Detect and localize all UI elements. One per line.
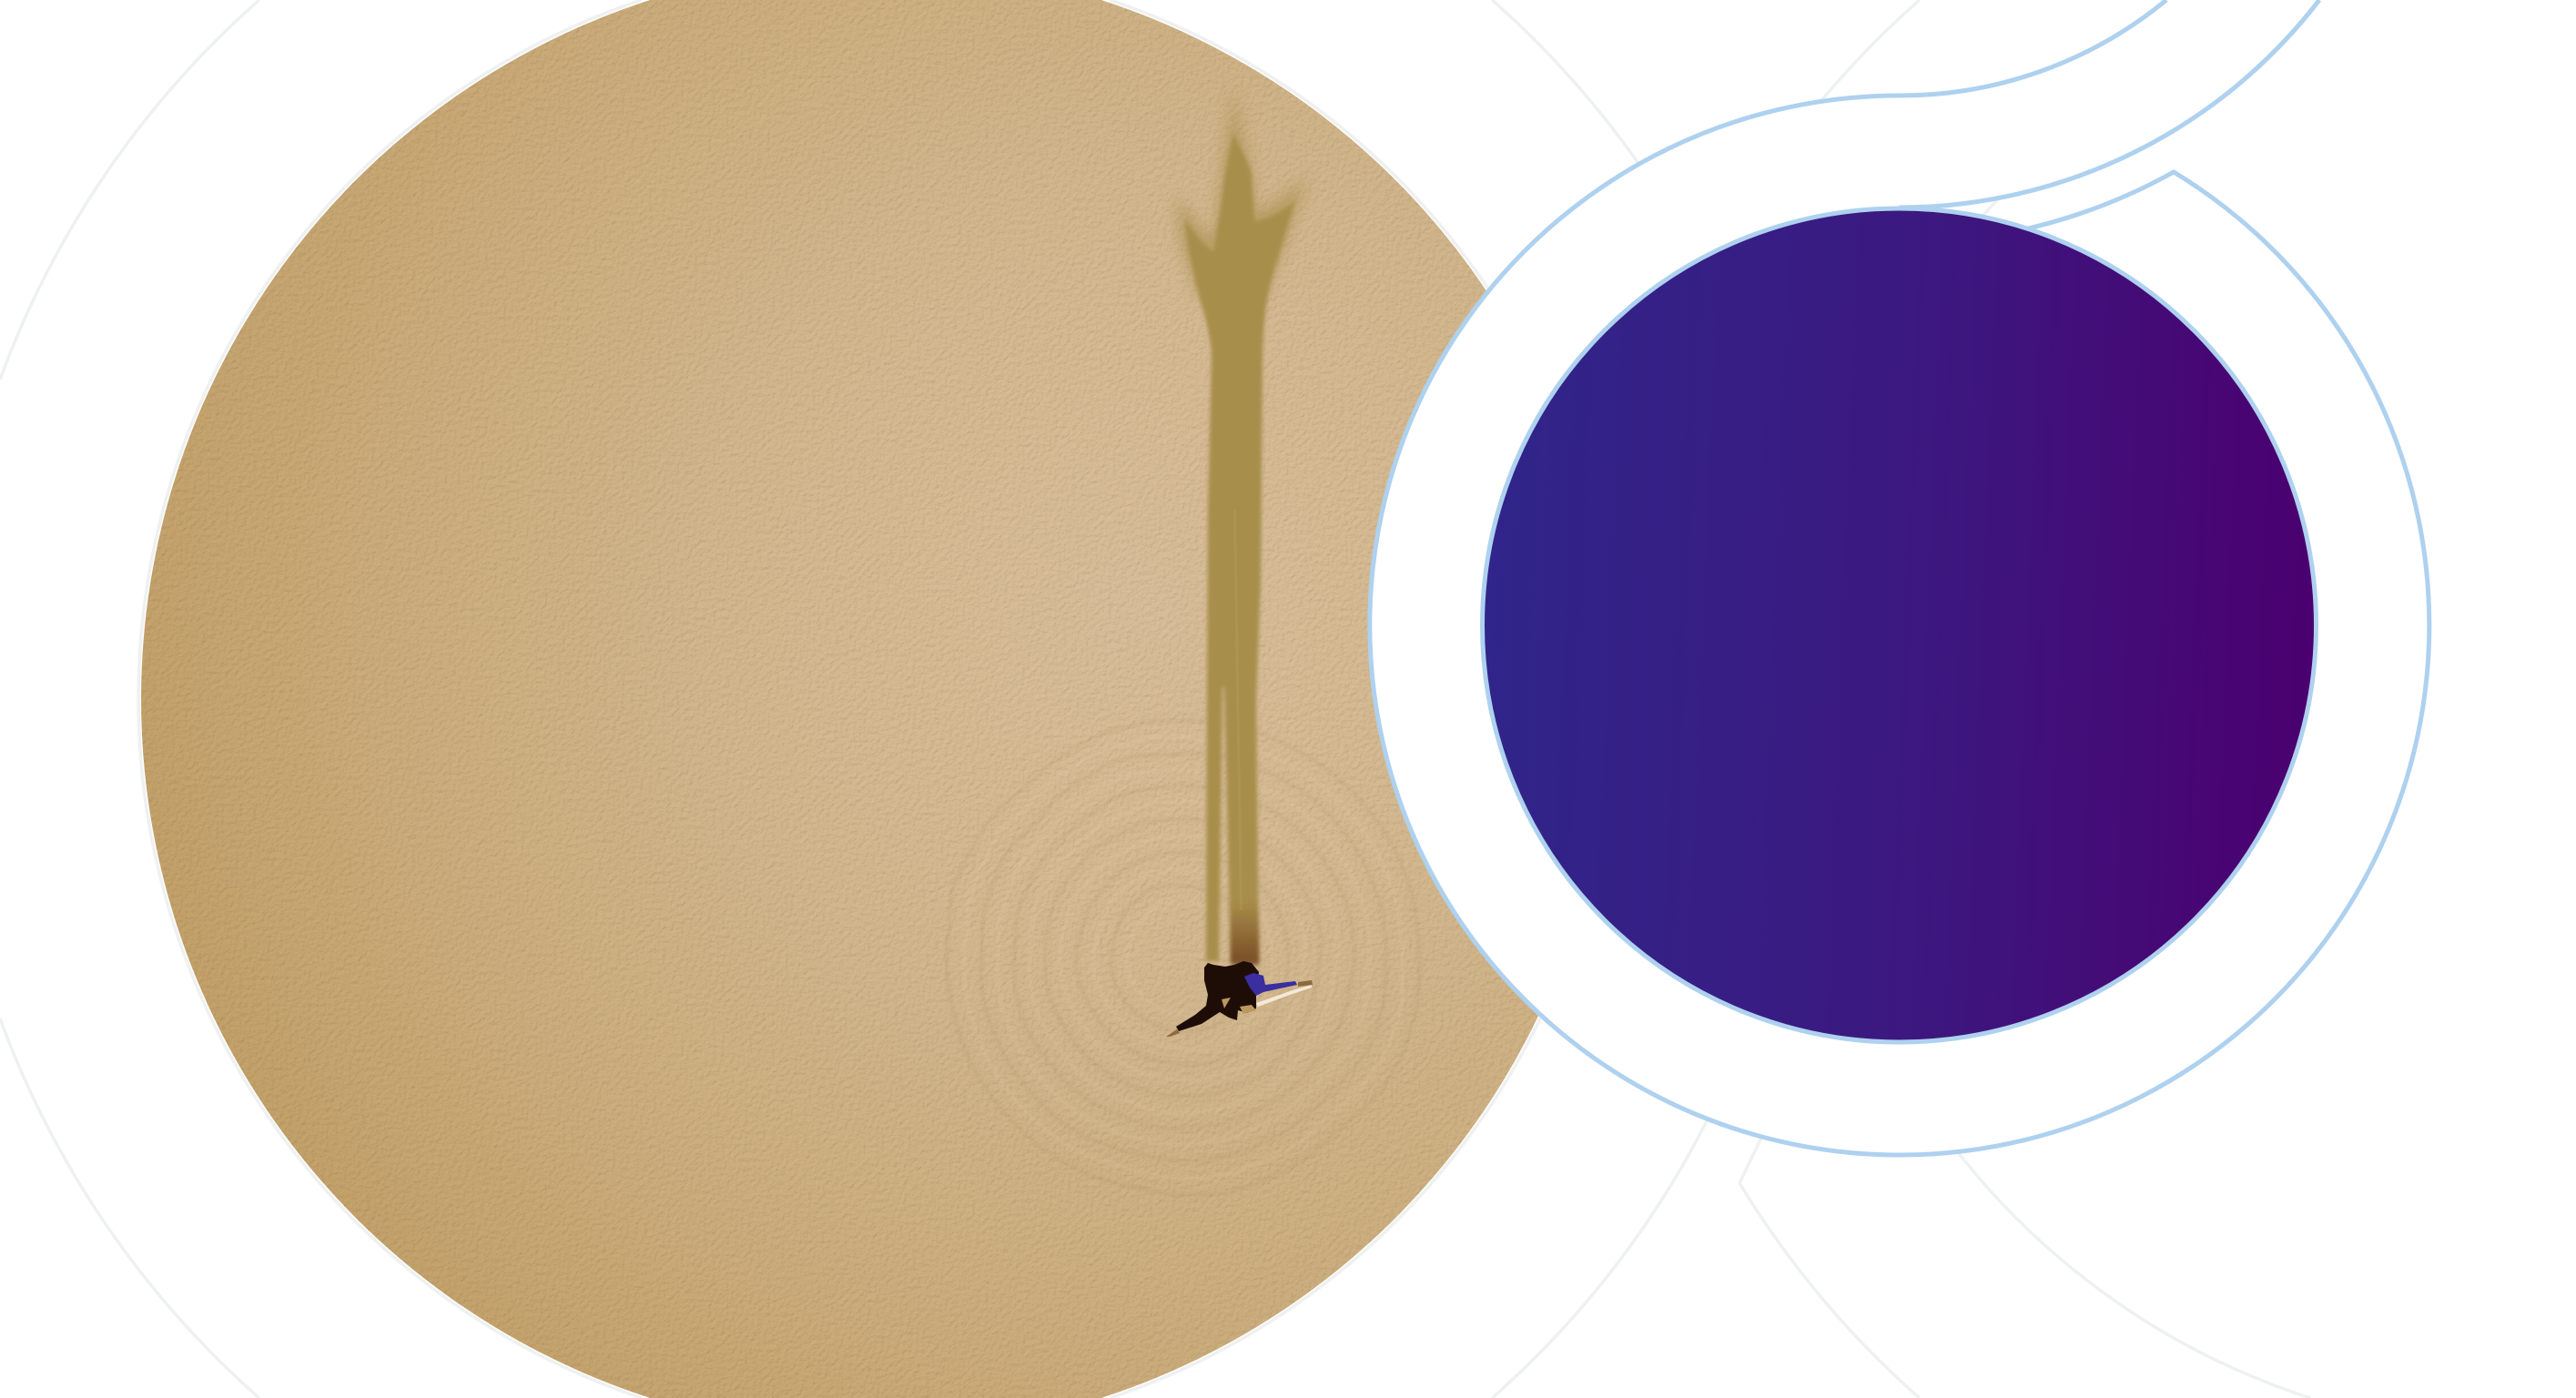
photo: sand grain texture xyxy=(137,0,1620,1398)
photo: sand base xyxy=(137,0,1620,1398)
figure: dark silhouette xyxy=(1176,961,1259,1031)
white ribbon and ring shape xyxy=(1370,0,2429,1155)
blue outline: inner ribbon xyxy=(1899,0,2319,208)
figure: hand tips xyxy=(1166,980,1313,1037)
photo: ripples around the figure xyxy=(947,721,1420,1194)
figure: white highlight under right arm xyxy=(1256,985,1312,1007)
photo: long shadow of the figure xyxy=(1176,87,1307,965)
grey arc fragment in the wedge under the ribbon xyxy=(1982,196,2001,217)
figure: blue shirt and arm xyxy=(1244,973,1297,996)
purple gradient disc xyxy=(1482,208,2316,1042)
blue outline: outer ribbon and ring xyxy=(1370,0,2429,1155)
aerial photo circle xyxy=(137,0,1620,1398)
photo: figure with outstretched arms xyxy=(1166,961,1313,1037)
figure: tan detail near the hip xyxy=(1222,998,1256,1014)
